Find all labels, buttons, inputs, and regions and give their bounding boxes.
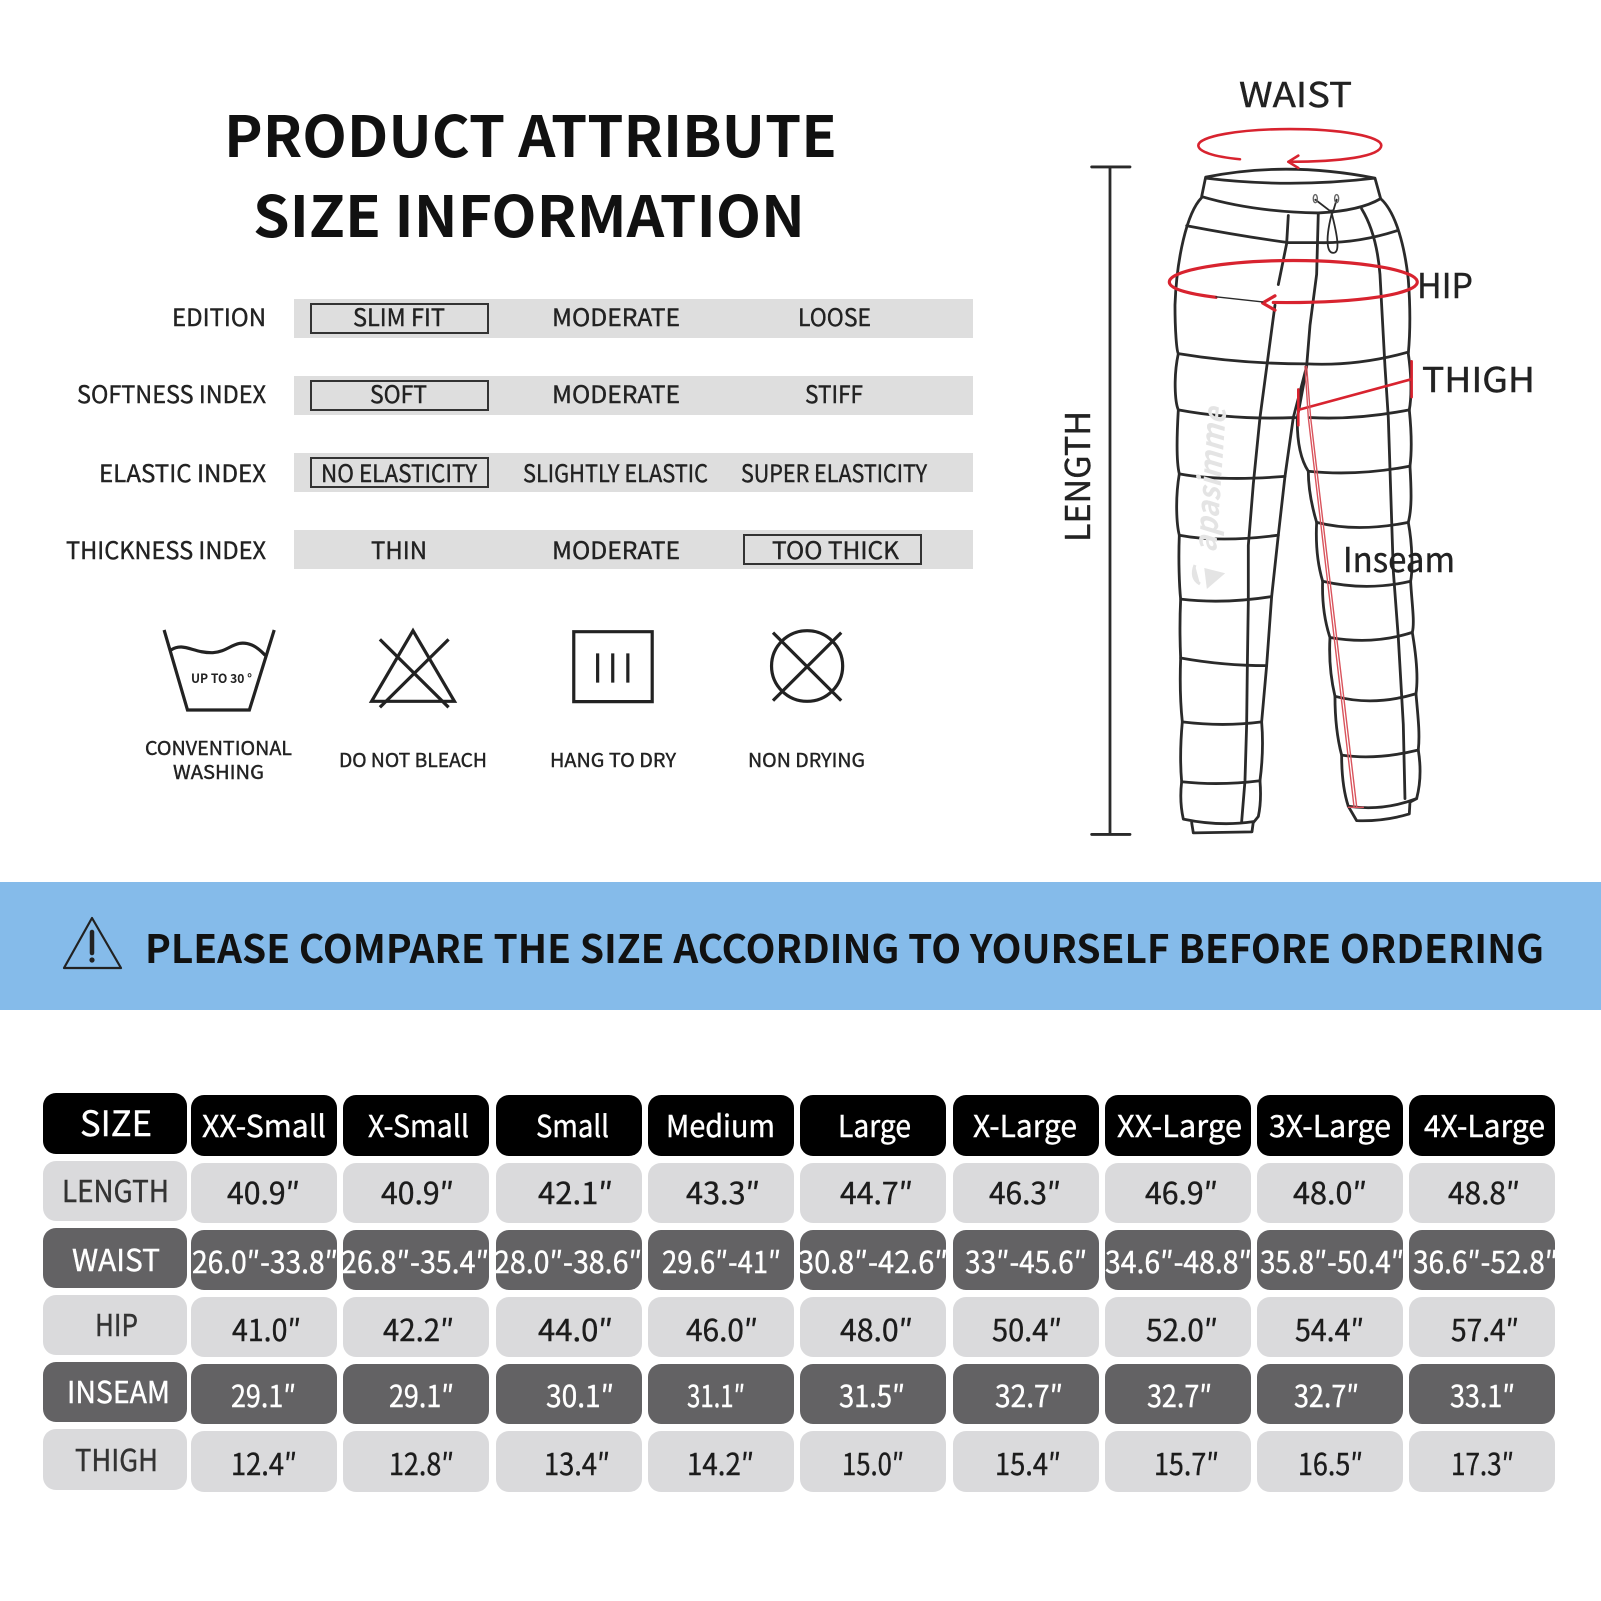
panel: elastic index row: NO ELASTICITY [321,454,477,489]
label: hip: HIP [1417,259,1473,308]
label: thigh: THIGH [1422,353,1535,402]
panel: elastic index row: ELASTIC INDEX [99,454,266,489]
panel: elastic index row [99,453,973,492]
table: row labels: SIZE [80,1096,152,1147]
table: header row: Large [838,1102,911,1146]
panel: edition row: SLIM FIT [353,298,445,333]
table: row labels [43,1093,187,1490]
table: inseam row: 29.1″ [389,1372,454,1416]
table: waist row: 26.0″-33.8″ [192,1238,338,1282]
left seam [1242,216,1288,822]
table: header row [191,1095,1555,1156]
icon: pants outline [1175,169,1420,833]
table: length row: 40.9″ [227,1169,300,1213]
panel: thickness index row: THIN [371,531,427,566]
panel: edition row: MODERATE [552,298,680,333]
waistband [1202,169,1381,213]
icon: hang to dry [574,632,652,702]
table: header row: Medium [666,1102,775,1146]
text: non drying: NON DRYING [748,746,865,773]
table: length row: 46.9″ [1145,1169,1218,1213]
panel: softness index row: MODERATE [552,375,680,410]
right seams [1362,209,1405,799]
fly [1307,213,1318,366]
text: conventional washing [145,734,292,785]
table: thigh row [191,1431,1555,1492]
title: SIZE INFORMATION [253,172,805,254]
panel: edition row [172,298,973,338]
table: waist row: 30.8″-42.6″ [798,1238,948,1282]
banner text: PLEASE COMPARE THE SIZE ACCORDING TO YOURSELF BEFORE ORDERING [145,919,1544,975]
inner left leg [1253,366,1307,823]
table: waist row: 33″-45.6″ [965,1238,1087,1282]
table: waist row: 35.8″-50.4″ [1260,1238,1404,1282]
table: length row: 43.3″ [686,1169,760,1213]
table: thigh row: 15.4″ [995,1440,1061,1484]
table: hip row: 41.0″ [232,1306,301,1350]
table: waist row: 26.8″-35.4″ [341,1238,489,1282]
table: thigh row: 17.3″ [1451,1440,1514,1484]
icon: non drying [772,631,843,701]
table: thigh row: 14.2″ [687,1440,754,1484]
table: hip row: 57.4″ [1451,1306,1519,1350]
icon: conventional washing: UP TO 30 ° [191,668,252,687]
table: thigh row: 12.4″ [231,1440,297,1484]
table: inseam row: 33.1″ [1450,1372,1515,1416]
watermark: apasimme [1180,403,1235,554]
text: conventional washing: CONVENTIONAL [145,734,292,761]
table: waist row: 36.6″-52.8″ [1413,1238,1558,1282]
label: length: LENGTH [1051,411,1100,542]
table: inseam row: 32.7″ [995,1372,1063,1416]
panel: thickness index row: TOO THICK [772,531,900,566]
arrow: length dimension line [1092,167,1130,834]
table: hip row: 52.0″ [1146,1306,1218,1350]
table: hip row: 50.4″ [992,1306,1062,1350]
table: thigh row: 16.5″ [1298,1440,1363,1484]
table: hip row: 46.0″ [686,1306,758,1350]
table: header row: 3X-Large [1269,1102,1391,1146]
table: header row: 4X-Large [1424,1102,1545,1146]
table: waist row: 28.0″-38.6″ [494,1238,642,1282]
table: inseam row: 31.5″ [839,1372,905,1416]
arrow: thigh measure [1298,361,1412,425]
arrow: hip measure [1169,261,1417,310]
table: header row: XX-Large [1117,1102,1242,1146]
panel: elastic index row: SLIGHTLY ELASTIC [523,454,708,489]
title [224,92,837,254]
table: thigh row: 15.7″ [1154,1440,1219,1484]
table: header row: XX-Small [202,1102,326,1146]
table: row labels: INSEAM [67,1368,170,1412]
label: waist: WAIST [1239,68,1352,117]
icon: warning triangle [64,918,121,968]
table: thigh row: 12.8″ [389,1440,454,1484]
table: inseam row [191,1364,1555,1424]
panel: thickness index row: MODERATE [552,531,680,566]
icon: do not bleach [372,631,454,707]
table: waist row: 29.6″-41″ [662,1238,781,1282]
table: thigh row: 15.0″ [842,1440,904,1484]
panel: elastic index row: SUPER ELASTICITY [741,454,927,489]
table: inseam row: 29.1″ [231,1372,296,1416]
table: waist row: 34.6″-48.8″ [1105,1238,1252,1282]
grommets [1313,195,1339,203]
text: conventional washing: WASHING [173,758,264,785]
title: PRODUCT ATTRIBUTE [224,92,837,174]
quilting lines [1178,226,1418,808]
arrow: waist measure [1198,129,1381,168]
table: hip row: 54.4″ [1295,1306,1364,1350]
table: length row: 48.8″ [1448,1169,1520,1213]
table: header row: X-Small [368,1102,469,1146]
panel: softness index row [77,375,973,415]
table: row labels: WAIST [72,1236,160,1280]
table: thigh row: 13.4″ [544,1440,610,1484]
panel: softness index row: SOFT [370,375,427,410]
table: length row: 44.7″ [840,1169,913,1213]
table: inseam row: 32.7″ [1147,1372,1212,1416]
outer left leg [1175,198,1253,833]
table: length row: 48.0″ [1293,1169,1367,1213]
drawstring [1315,200,1337,253]
table: inseam row: 30.1″ [546,1372,614,1416]
right leg outline [1297,199,1420,821]
table: hip row [191,1297,1555,1357]
table: length row: 46.3″ [989,1169,1061,1213]
table: header row: Small [536,1102,609,1146]
text: hang to dry: HANG TO DRY [550,746,677,773]
panel: softness index row: STIFF [805,375,863,410]
table: length row: 40.9″ [381,1169,454,1213]
panel: softness index row: SOFTNESS INDEX [77,375,266,410]
text: do not bleach: DO NOT BLEACH [339,746,487,773]
panel: thickness index row [66,530,973,569]
table: length row [191,1163,1555,1223]
table: hip row: 42.2″ [383,1306,454,1350]
table: row labels: THIGH [75,1436,158,1480]
table: length row: 42.1″ [538,1169,613,1213]
table: waist row [191,1230,1558,1290]
label: inseam: Inseam [1343,533,1455,582]
table: hip row: 44.0″ [538,1306,613,1350]
table: row labels: HIP [95,1301,138,1345]
table: header row: X-Large [973,1102,1077,1146]
banner [0,882,1601,1010]
icon: conventional washing [164,630,274,710]
arrow: inseam measure [1305,366,1363,807]
panel: edition row: LOOSE [798,298,871,333]
panel: thickness index row: THICKNESS INDEX [66,531,266,566]
table: hip row: 48.0″ [840,1306,913,1350]
table: inseam row: 31.1″ [687,1372,745,1416]
table: row labels: LENGTH [62,1167,169,1211]
panel: edition row: EDITION [172,298,266,333]
table: inseam row: 32.7″ [1294,1372,1359,1416]
